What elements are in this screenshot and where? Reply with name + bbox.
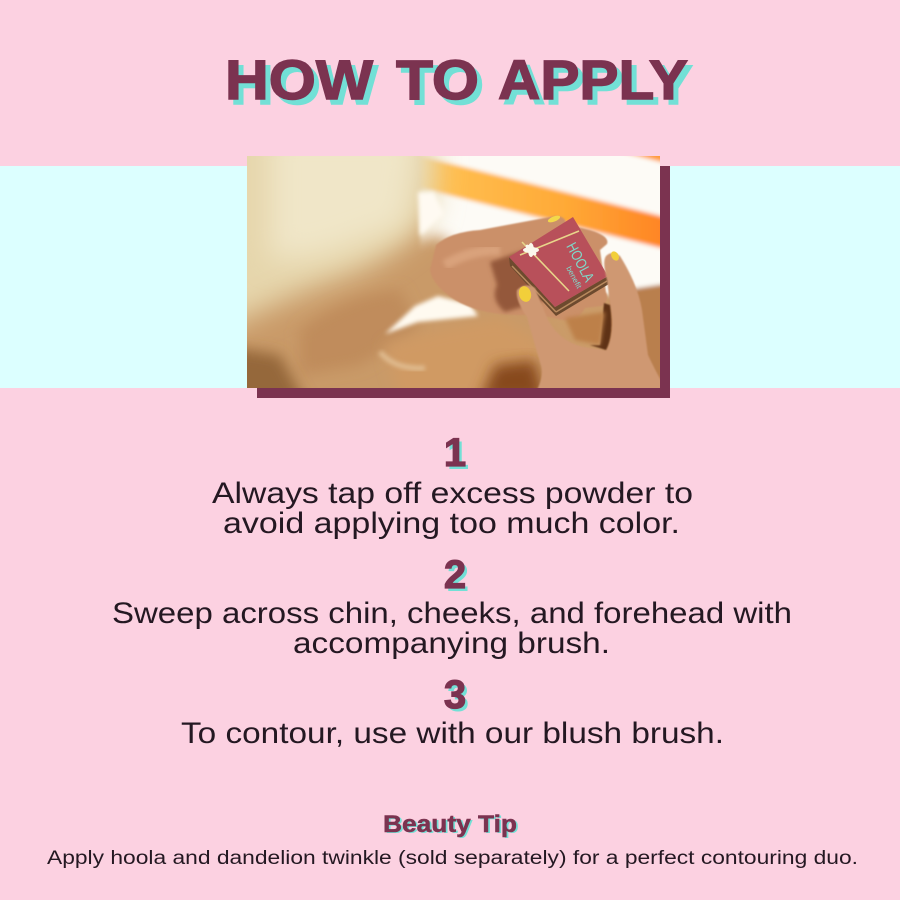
step 2 number: 2 [444,553,466,597]
photo frame shadow [257,166,670,398]
box lettering: benefit [564,265,584,291]
step 3 number: 3 [444,673,466,717]
photo: hands holding blush box [247,156,660,388]
blush box lid [509,217,608,307]
beauty tip heading: Beauty Tip [383,811,517,838]
title: HOW TO APPLY: HOW [225,48,373,111]
step 1 number: 1 [444,431,466,475]
step 2 text: Sweep across chin, cheeks, and forehead with [112,597,792,630]
title: HOW TO APPLY: APPLY [503,53,693,116]
step 3 number: 3 [447,676,469,720]
gold ribbon [520,231,579,291]
photo backdrop: white wall [418,156,660,379]
beauty tip heading: Beauty Tip [385,812,519,839]
photo: rear hand nail [548,216,560,222]
photo: front hand and thumb [517,253,662,392]
title: HOW TO APPLY [225,48,693,116]
step 2 text: accompanying brush. [293,627,610,660]
box lettering [566,242,594,290]
mint band [0,166,900,388]
step 1 number: 1 [447,434,469,478]
step 3 text: To contour, use with our blush brush. [181,717,724,750]
beauty tip text: Apply hoola and dandelion twinkle (sold separately) for a perfect contouring duo. [47,848,858,869]
photo: rear hand [430,216,607,320]
title: HOW TO APPLY: APPLY [498,48,688,111]
photo: yellow nails [517,250,621,303]
title: HOW TO APPLY: TO [401,53,484,116]
title: HOW TO APPLY: TO [396,48,479,111]
box lettering: HOOLA [562,240,597,285]
step 1 text: Always tap off excess powder to [212,477,693,510]
blush box side [509,257,609,316]
step 1 text [212,477,693,540]
step 2 text [112,597,792,660]
white flower bow [523,243,539,257]
title: HOW TO APPLY: HOW [230,53,378,116]
photo: blurred shoulder and hair [247,156,542,388]
step 1 text: avoid applying too much color. [223,507,680,540]
step 2 number: 2 [447,556,469,600]
